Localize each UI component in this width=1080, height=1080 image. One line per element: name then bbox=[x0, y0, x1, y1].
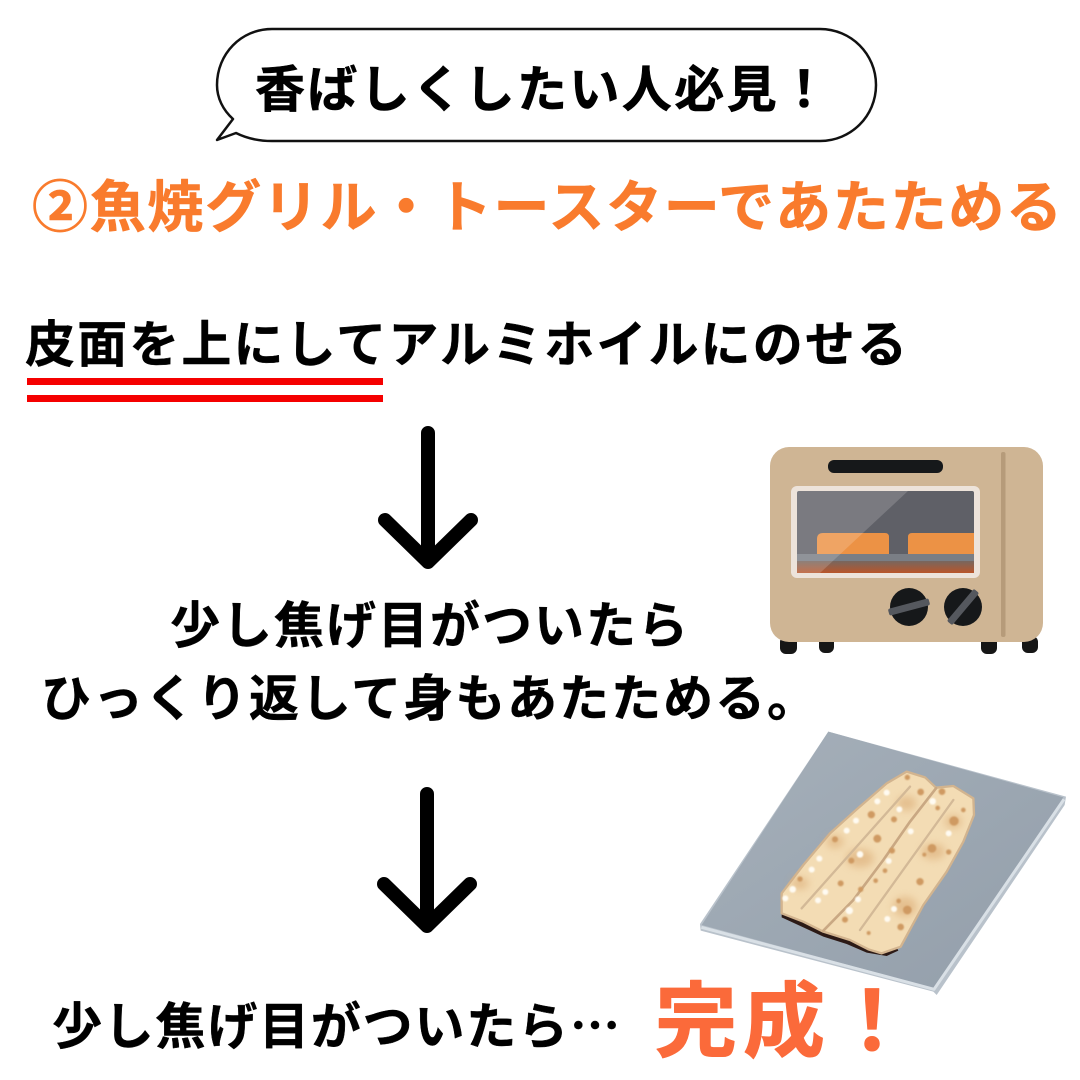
toaster top slot bbox=[828, 460, 943, 473]
eel fillet bbox=[782, 772, 974, 953]
icon: toaster oven bbox=[770, 447, 1043, 654]
speech bubble heading bbox=[217, 29, 876, 141]
toaster body bbox=[770, 447, 1043, 642]
foil sheet bbox=[700, 732, 1066, 995]
ellipsis: … bbox=[570, 987, 620, 1059]
toaster window bbox=[791, 486, 980, 578]
step 2 text bbox=[41, 598, 817, 727]
eel highlights bbox=[782, 790, 952, 922]
finished label: 完成！ bbox=[655, 977, 913, 1068]
eel grooves bbox=[802, 787, 953, 931]
toaster strip bbox=[1001, 452, 1006, 637]
title: ②魚焼グリル・トースターであたためる bbox=[32, 176, 1062, 239]
step 2 text: 少し焦げ目がついたら bbox=[170, 598, 688, 654]
icon: grilled eel on foil bbox=[700, 732, 1066, 995]
arrow 2 bbox=[384, 794, 470, 926]
step 3 text: 少し焦げ目がついたら bbox=[52, 999, 568, 1055]
eel char spots bbox=[797, 775, 966, 935]
toaster feet bbox=[780, 636, 1038, 654]
bubble text: 香ばしくしたい人必見！ bbox=[255, 62, 829, 118]
eel toasted patches bbox=[791, 796, 962, 917]
toaster knobs bbox=[888, 588, 982, 626]
arrow 1 bbox=[385, 433, 471, 562]
bubble outline bbox=[217, 29, 876, 141]
eel skin edge bbox=[782, 900, 898, 956]
step 2 text: ひっくり返して身もあたためる。 bbox=[41, 671, 817, 727]
red double underline bbox=[27, 378, 383, 402]
step 1 text: 皮面を上にしてアルミホイルにのせる bbox=[25, 317, 907, 373]
